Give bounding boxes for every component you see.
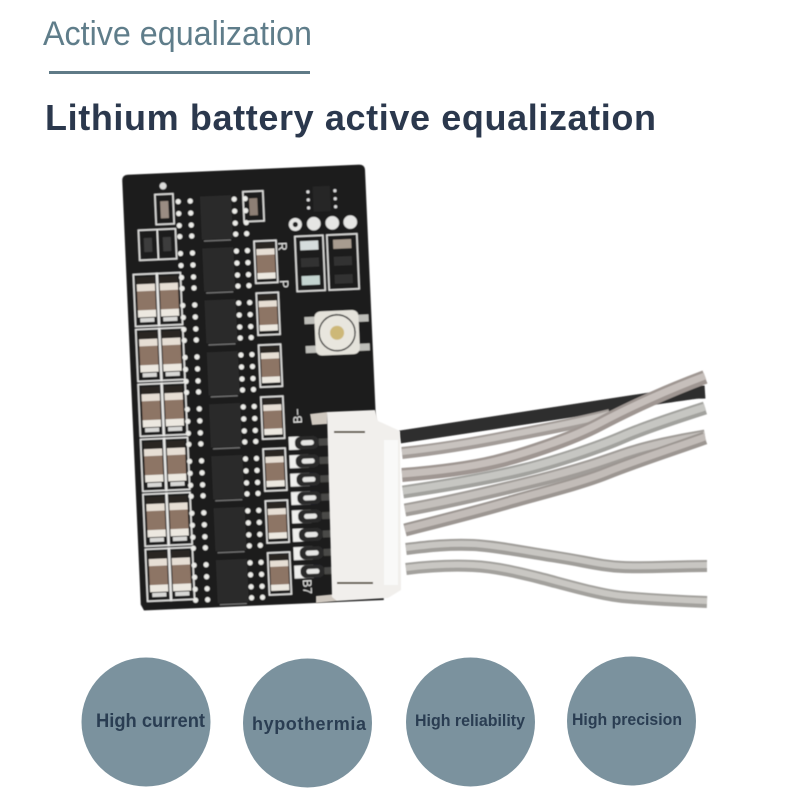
subtitle underline [49, 71, 310, 74]
wire: gray 4 [405, 435, 705, 510]
R and P silkscreen labels: R [275, 242, 289, 251]
white wire connector [310, 410, 401, 603]
feature: High current [82, 658, 210, 786]
feature: hypothermia [243, 658, 372, 788]
left capacitor array [133, 273, 195, 601]
feature: High reliability: High reliability [415, 712, 526, 730]
resistor and LED boxes [295, 234, 359, 291]
wire: gray 6 [406, 544, 707, 567]
feature: High current: High current [96, 711, 206, 732]
feature: High precision [567, 656, 696, 786]
subtitle: Active equalization: Active equalization [43, 15, 312, 53]
wire: gray 3 [403, 407, 705, 492]
B- and B7 silkscreen labels: B− [290, 408, 305, 424]
wire: gray 2 [402, 376, 705, 475]
wire: gray 1 [402, 414, 610, 453]
connector terminals [289, 435, 347, 579]
R and P silkscreen labels [275, 242, 291, 288]
circuit board [122, 164, 384, 611]
top-right SOIC chip [306, 186, 337, 212]
four through-hole pads [289, 215, 357, 232]
wire: gray 7 [406, 565, 707, 602]
mounting hole [159, 182, 167, 190]
central IC column [175, 195, 265, 607]
photo: cable bundle [400, 376, 707, 602]
right capacitor column [254, 240, 291, 595]
feature: High reliability [406, 658, 535, 786]
tactile push button [304, 309, 370, 356]
feature: High precision: High precision [572, 711, 682, 729]
wire: black [400, 392, 705, 437]
R and P silkscreen labels: P [277, 280, 291, 288]
B- and B7 silkscreen labels [290, 408, 314, 595]
top-left small components [137, 190, 266, 260]
wire: gray 5 [405, 437, 705, 530]
board body [122, 164, 384, 611]
B- and B7 silkscreen labels: B7 [300, 579, 314, 595]
feature: hypothermia: hypothermia [252, 714, 367, 734]
heading: Lithium battery active equalization: Lithium battery active equalization [45, 97, 656, 138]
